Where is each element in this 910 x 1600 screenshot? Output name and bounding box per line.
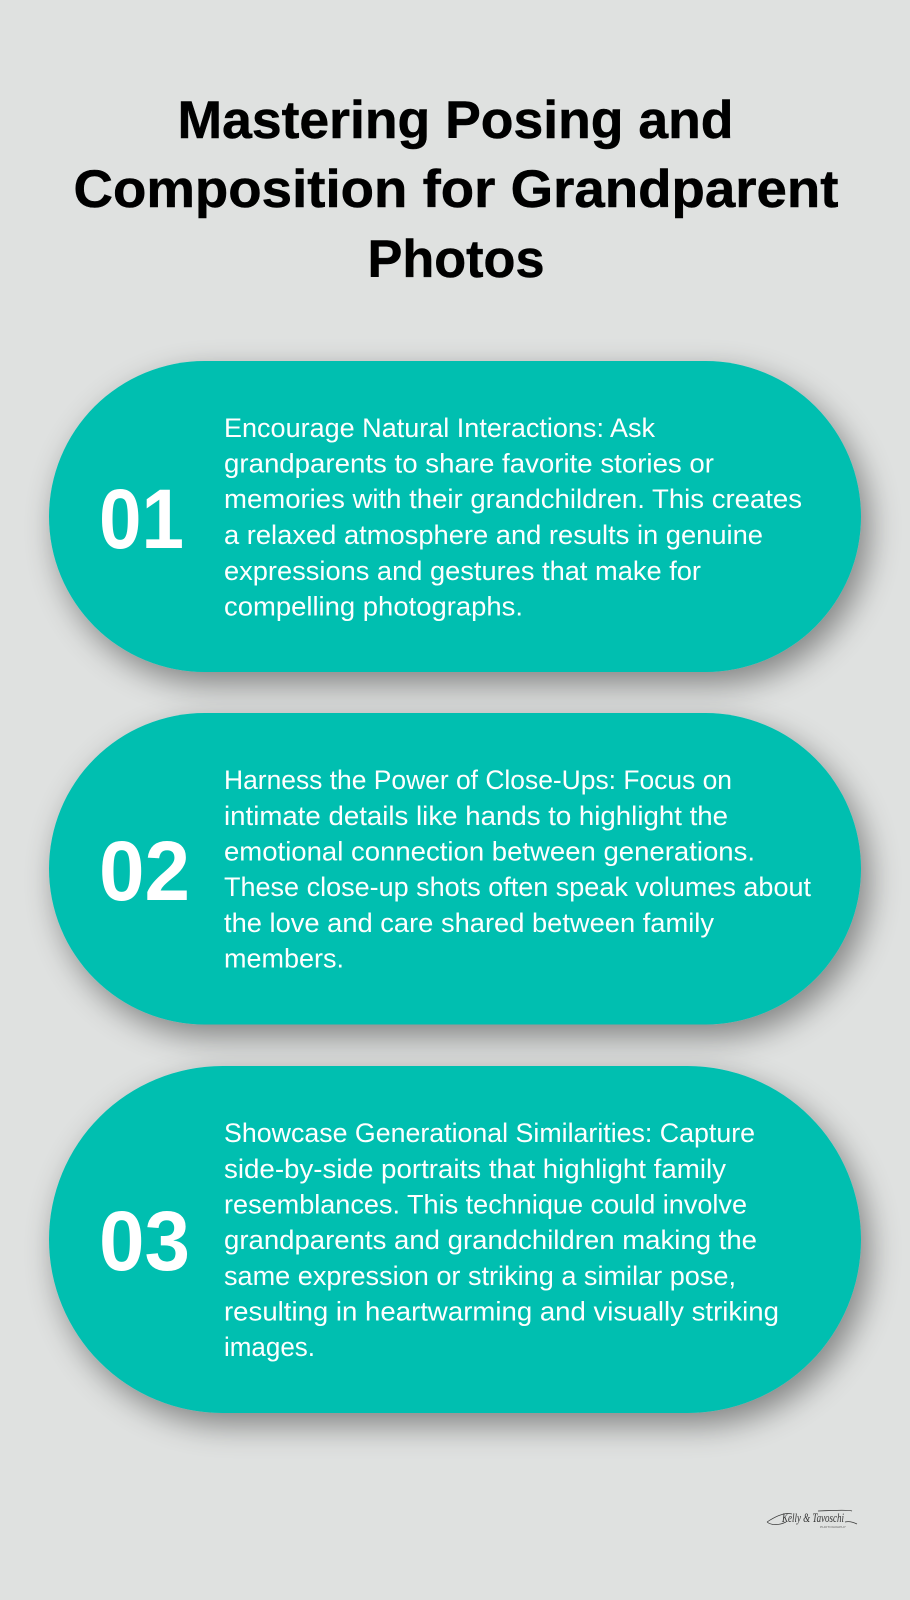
step 03 text: grandparents and grandchildren making the <box>224 1225 757 1255</box>
step 03 text: side-by-side portraits that highlight family <box>224 1154 727 1184</box>
step 02 text: These close-up shots often speak volumes about <box>224 872 811 902</box>
title <box>74 91 838 289</box>
panel: step 03 generational similarities <box>49 1066 861 1413</box>
number 03: 03 <box>99 1194 190 1288</box>
panel: step 02 close-ups <box>49 713 861 1024</box>
logo: signature: PHOTOGRAPHY <box>820 1525 846 1529</box>
number 02: 02 <box>99 824 190 918</box>
number 01: 01 <box>99 472 184 566</box>
step 01 text: compelling photographs. <box>224 592 523 622</box>
step 01 text: expressions and gestures that make for <box>224 556 701 586</box>
step 01 text <box>224 413 802 622</box>
step 03 text: same expression or striking a similar pose, <box>224 1261 736 1291</box>
step 02 text: the love and care shared between family <box>224 908 714 938</box>
pill background <box>49 1066 861 1413</box>
step 03 text <box>224 1118 779 1362</box>
step 03 text: resemblances. This technique could involve <box>224 1190 747 1220</box>
step 02 text: Harness the Power of Close-Ups: Focus on <box>224 765 732 795</box>
pill background <box>49 713 861 1024</box>
step 01 text: Encourage Natural Interactions: Ask <box>224 413 656 443</box>
title: Photos <box>368 230 544 289</box>
pill background <box>49 361 861 672</box>
panel: step 01 natural interactions <box>49 361 861 672</box>
step 01 text: a relaxed atmosphere and results in genuine <box>224 520 763 550</box>
logo: signature <box>767 1510 857 1529</box>
title: Composition for Grandparent <box>74 160 838 219</box>
title: Mastering Posing and <box>178 91 734 150</box>
step 03 text: Showcase Generational Similarities: Capture <box>224 1118 755 1148</box>
step 03 text: resulting in heartwarming and visually striking <box>224 1296 779 1326</box>
step 03 text: images. <box>224 1332 315 1362</box>
step 02 text: emotional connection between generations. <box>224 836 755 866</box>
logo: signature: Kelly & Tavoschi <box>781 1510 844 1525</box>
step 02 text <box>224 765 811 974</box>
step 01 text: grandparents to share favorite stories or <box>224 448 714 478</box>
step 02 text: intimate details like hands to highlight the <box>224 801 728 831</box>
step 02 text: members. <box>224 944 344 974</box>
step 01 text: memories with their grandchildren. This creates <box>224 484 802 514</box>
